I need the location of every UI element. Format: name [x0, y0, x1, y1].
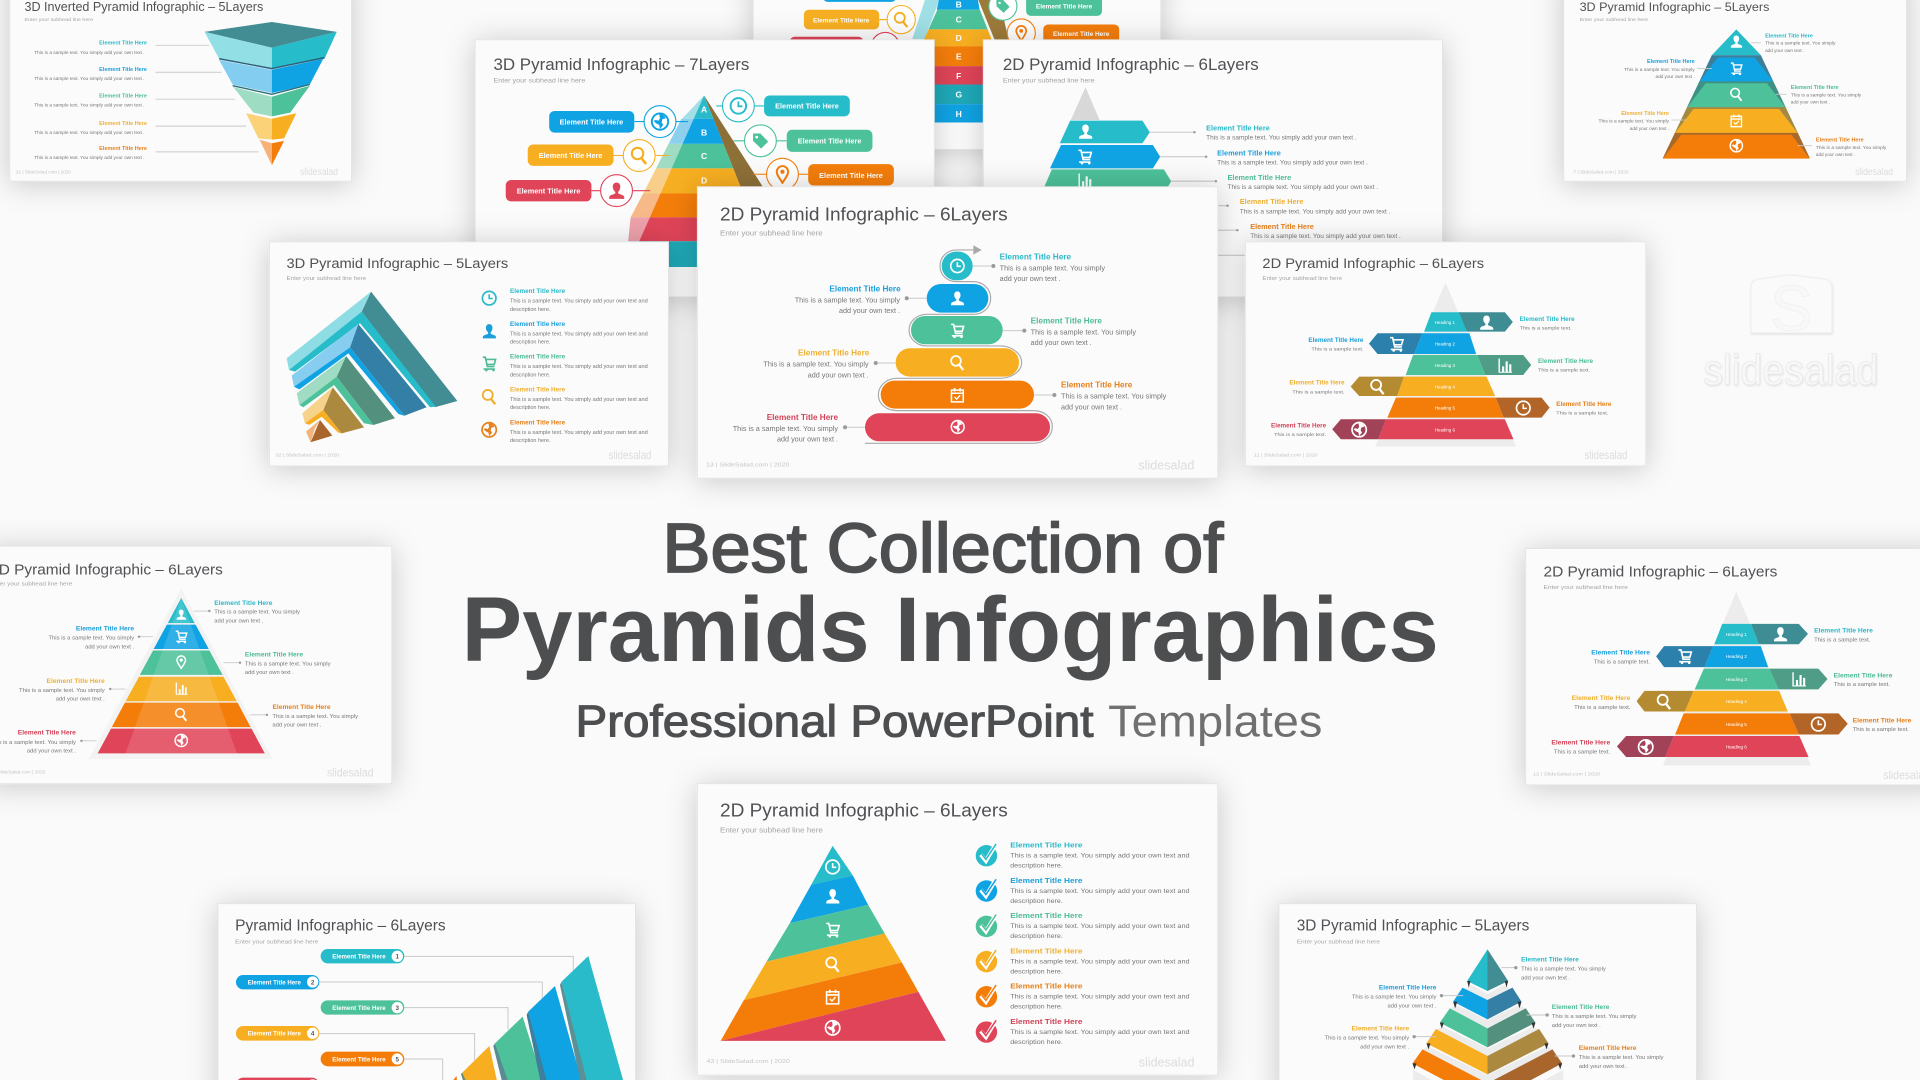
pyramid with arrow tabs — [1617, 592, 1848, 766]
callout pills — [790, 0, 1119, 61]
stepped 3D pyramid — [287, 292, 457, 442]
partial pyramid column: G — [955, 89, 962, 99]
element labels: This is a sample text. You simply add your own text . — [1250, 233, 1401, 240]
icon list: description here. — [510, 307, 550, 313]
element labels: Element Title Here — [1061, 380, 1133, 390]
element labels — [1324, 957, 1664, 1070]
pyramid with arrow tabs: Heading 2 — [1435, 342, 1455, 347]
element labels: This is a sample text. You simply — [1816, 145, 1887, 150]
element labels — [1551, 627, 1912, 755]
slide: 2D pyramid with heading arrows, right edge — [1526, 549, 1920, 785]
check list: Element Title Here — [1010, 1017, 1083, 1026]
element labels: Element Title Here — [798, 348, 870, 358]
logo: slidesalad embossed watermark: slidesalad — [1703, 346, 1878, 394]
slide: 2D pyramid with heading arrows, right of center: 11 | SlideSalad.com | 2020 — [1254, 453, 1318, 458]
pyramid with arrow tabs: Heading 3 — [1726, 677, 1747, 682]
logo: slidesalad embossed watermark — [1703, 274, 1878, 394]
element labels: This is a sample text. You simply — [1765, 41, 1836, 46]
slide: 3D stepped pyramid list: Enter your subhead line here — [287, 276, 366, 282]
icon list: description here. — [510, 438, 550, 444]
element labels: add your own text . — [1000, 275, 1061, 283]
icon list: description here. — [510, 372, 550, 378]
element labels: add your own text . — [214, 618, 264, 624]
slide: 3D pyramid 5 layers, top right — [1564, 0, 1907, 181]
element labels: This is a sample text. You simply — [48, 635, 134, 641]
pyramid with arrow tabs: Heading 6 — [1726, 745, 1747, 750]
numbered pills: Element Title Here — [332, 1056, 386, 1063]
element labels — [1271, 316, 1612, 438]
numbered pills: 1 — [396, 954, 400, 961]
partial pyramid column — [887, 0, 1025, 122]
element labels: Element Title Here — [1521, 957, 1579, 964]
slide: 3D inverted pyramid, top left: slidesalad — [300, 167, 338, 178]
slide: 2D slanted pyramid with check list, bottom center — [697, 784, 1218, 1075]
pyramid arrows — [1041, 87, 1171, 193]
numbered pills: Element Title Here — [248, 1031, 301, 1038]
element labels: This is a sample text. You simply add your own text . — [34, 103, 144, 109]
element labels: Element Title Here — [1551, 740, 1611, 747]
element labels: add your own text . — [1521, 975, 1571, 981]
element labels: Element Title Here — [829, 283, 901, 293]
pyramid with arrow tabs: Heading 4 — [1435, 384, 1455, 389]
element labels: This is a sample text. — [1814, 637, 1870, 643]
slide: 2D pyramid with light centre, left: slidesalad — [327, 765, 374, 779]
slide: 2D pyramid with heading arrows, right edge: Enter your subhead line here — [1543, 585, 1628, 591]
element labels: add your own text . — [1061, 403, 1122, 411]
element labels: This is a sample text. You simply — [1031, 328, 1136, 336]
numbered pills: Element Title Here — [332, 1005, 386, 1012]
element labels: This is a sample text. You simply — [19, 688, 105, 694]
element labels: add your own text . — [1630, 126, 1669, 131]
element labels: Element Title Here — [76, 626, 134, 633]
element labels: This is a sample text. — [1554, 749, 1610, 755]
7 layer pyramid: C — [701, 151, 707, 161]
slide: 2D pyramid with heading arrows, right edge: 12 | SlideSalad.com | 2020 — [1533, 772, 1601, 777]
icon list — [482, 288, 648, 444]
element labels: This is a sample text. — [1520, 325, 1572, 331]
element labels: This is a sample text. You simply add your own text . — [34, 155, 144, 161]
element labels: This is a sample text. You simply add your own text . — [34, 76, 144, 82]
element labels: add your own text . — [1031, 339, 1092, 347]
slide: 3D pyramid 7 layers — [475, 40, 934, 297]
icon list: Element Title Here — [510, 419, 566, 426]
callout pills with icons — [506, 90, 894, 207]
element labels: Element Title Here — [99, 121, 147, 127]
element labels: Element Title Here — [18, 730, 76, 737]
element labels: Element Title Here — [47, 678, 105, 685]
check list: description here. — [1010, 933, 1063, 940]
element labels: Element Title Here — [767, 412, 838, 422]
check list: This is a sample text. You simply add your own text and — [1010, 923, 1190, 930]
pyramid with arrow tabs: Heading 4 — [1726, 699, 1747, 704]
slide: 3D pyramid 7 layers: 3D Pyramid Infographic – 7Layers — [493, 56, 749, 74]
element labels: This is a sample text. You simply add your own text . — [34, 130, 144, 136]
element labels: This is a sample text. — [1274, 432, 1326, 438]
partial pyramid column: H — [956, 109, 962, 119]
pyramid with arrow tabs: Heading 6 — [1435, 427, 1455, 432]
element labels: Element Title Here — [1621, 111, 1669, 117]
element labels: Element Title Here — [1552, 1004, 1610, 1011]
element labels: add your own text . — [1360, 1044, 1410, 1050]
pyramid with arrow tabs — [1332, 283, 1550, 447]
slide: 3D pyramid partially hidden, top center — [753, 0, 1161, 149]
icon list: Element Title Here — [510, 321, 566, 328]
pyramid with arrow tabs: Heading 5 — [1435, 406, 1455, 411]
element labels: Element Title Here — [1289, 380, 1345, 387]
element labels: This is a sample text. You simply — [1552, 1014, 1637, 1020]
pyramid with arrow tabs: Heading 5 — [1726, 722, 1747, 727]
element labels: Element Title Here — [1556, 401, 1612, 408]
partial pyramid column: F — [956, 71, 961, 81]
slide: 2D slanted pyramid with check list, bottom center: slidesalad — [1139, 1055, 1194, 1070]
check list: This is a sample text. You simply add your own text and — [1010, 994, 1190, 1001]
slide: 2D pyramid with heading arrows, right of center: slidesalad — [1584, 449, 1627, 462]
element labels: Element Title Here — [1206, 124, 1270, 133]
element labels: This is a sample text. You simply — [1624, 67, 1696, 72]
element labels: This is a sample text. — [1594, 659, 1650, 665]
partial pyramid column: D — [956, 33, 962, 43]
callout pills with icons: Element Title Here — [798, 137, 861, 146]
check list: description here. — [1010, 968, 1063, 975]
stacked pills — [865, 252, 1050, 441]
7 layer pyramid: B — [701, 127, 707, 137]
element labels: Element Title Here — [1816, 137, 1864, 143]
slide: 3D inverted pyramid, top left: 31 | SlideSalad.com | 2020 — [16, 169, 72, 174]
slide: stacked pill pyramid, center: Enter your subhead line here — [720, 230, 823, 237]
slide: 3D pyramid 5 layers, top right: 3D Pyramid Infographic – 5Layers — [1580, 0, 1769, 14]
element labels: add your own text . — [1656, 74, 1695, 79]
element labels: Element Title Here — [1250, 222, 1314, 231]
check list: Element Title Here — [1010, 841, 1083, 850]
main title: Templates — [1108, 698, 1322, 747]
slide: 3D pyramid 5 layers, top right: 7 | SlideSalad.com | 2020 — [1573, 169, 1629, 174]
icon list: description here. — [510, 405, 550, 411]
slide: stacked pill pyramid, center: 2D Pyramid Infographic – 6Layers — [720, 204, 1008, 225]
slide: 3D pyramid 5 layers, top right: slidesalad — [1855, 167, 1893, 178]
3D layered pyramid — [1663, 29, 1810, 159]
element labels: Element Title Here — [99, 67, 147, 73]
six layer pyramid — [89, 589, 272, 759]
pyramid with arrow tabs: Heading 1 — [1435, 320, 1455, 325]
icon list: This is a sample text. You simply add your own text and — [510, 397, 648, 403]
slide: 2D pyramid with heading arrows, right of center: Enter your subhead line here — [1262, 276, 1342, 282]
check list: Element Title Here — [1010, 981, 1083, 990]
icon list: This is a sample text. You simply add your own text and — [510, 430, 648, 436]
numbered pills: Element Title Here — [332, 954, 386, 961]
slide: 3D pyramid 5 layers, top right: Enter your subhead line here — [1580, 17, 1649, 23]
element labels: Element Title Here — [1228, 173, 1291, 182]
main title: Pyramids Infographics — [462, 579, 1439, 681]
icon list: This is a sample text. You simply add your own text and — [510, 364, 648, 370]
numbered pills: 3 — [396, 1005, 400, 1012]
element labels: This is a sample text. You simply — [272, 714, 358, 720]
slide: 2D pyramid 6 layers arrows: 2D Pyramid Infographic – 6Layers — [1003, 56, 1259, 74]
slide: stacked pill pyramid, center — [697, 187, 1218, 478]
element labels: This is a sample text. — [1556, 410, 1608, 416]
element labels — [1599, 33, 1887, 157]
element labels: This is a sample text. You simply — [1599, 118, 1670, 123]
element labels: This is a sample text. You simply — [763, 361, 869, 369]
main title: Professional PowerPoint — [576, 698, 1093, 747]
numbered pills: 5 — [396, 1056, 400, 1063]
slide: stacked pill pyramid, center: 13 | SlideSalad.com | 2020 — [706, 463, 789, 469]
check list: description here. — [1010, 1039, 1063, 1046]
icon list: Element Title Here — [510, 288, 566, 295]
partial pyramid column: E — [956, 51, 962, 61]
element labels: add your own text . — [839, 307, 900, 315]
element labels: add your own text . — [808, 371, 869, 379]
element labels: add your own text . — [1579, 1064, 1628, 1070]
check list — [976, 841, 1190, 1046]
element labels: This is a sample text. You simply add your own text . — [1217, 159, 1368, 166]
element labels: This is a sample text. — [1834, 682, 1890, 688]
element labels: add your own text . — [1552, 1023, 1601, 1029]
slide: pyramid with numbered pills, bottom left — [218, 904, 636, 1080]
slide: 2D pyramid 6 layers arrows — [983, 40, 1442, 297]
element labels: This is a sample text. You simply add your own text . — [1228, 184, 1378, 191]
pyramid with arrow tabs: Heading 2 — [1726, 654, 1747, 659]
element labels — [34, 41, 258, 161]
element labels: Element Title Here — [1308, 337, 1364, 344]
element labels: Element Title Here — [1520, 316, 1575, 323]
element labels: Element Title Here — [99, 94, 147, 100]
slide: stacked pill pyramid, center: slidesalad — [1138, 458, 1194, 472]
slide: 2D pyramid with heading arrows, right edge: 2D Pyramid Infographic – 6Layers — [1543, 565, 1777, 581]
element labels: add your own text . — [1387, 1003, 1437, 1009]
element labels: add your own text . — [245, 670, 294, 676]
element labels: Element Title Here — [99, 41, 147, 47]
numbered pills — [236, 949, 404, 1080]
element labels: This is a sample text. You simply — [733, 425, 838, 433]
element labels: This is a sample text. You simply — [1791, 92, 1862, 97]
element labels: This is a sample text. — [1538, 368, 1590, 374]
element labels: Element Title Here — [1853, 717, 1912, 724]
slide: 3D stepped pyramid list: slidesalad — [609, 449, 651, 462]
slide: pyramid with numbered pills, bottom left: Enter your subhead line here — [235, 939, 318, 945]
snake outline and arrow — [865, 250, 1052, 443]
element labels: This is a sample text. You simply add your own text . — [1206, 135, 1357, 142]
element labels: Element Title Here — [1647, 59, 1695, 65]
check list: Element Title Here — [1010, 911, 1083, 920]
slanted layers — [453, 956, 625, 1080]
check list: description here. — [1010, 863, 1063, 870]
numbered pills: 2 — [311, 979, 315, 986]
element labels: Element Title Here — [1765, 33, 1813, 39]
slide: 3D inverted pyramid, top left: Enter your subhead line here — [24, 17, 93, 23]
slanted pyramid — [721, 846, 946, 1041]
slide: 2D slanted pyramid with check list, bottom center: Enter your subhead line here — [720, 827, 823, 835]
element labels: Element Title Here — [1591, 650, 1650, 657]
7 layer pyramid — [628, 96, 784, 267]
check list: This is a sample text. You simply add your own text and — [1010, 1029, 1190, 1036]
slide: 3D stepped pyramid list — [269, 242, 669, 466]
slide: 3D chevron pyramid, bottom right: Enter your subhead line here — [1297, 939, 1380, 945]
icon list: description here. — [510, 340, 550, 346]
callout pills with icons: Element Title Here — [819, 171, 883, 180]
check list: Element Title Here — [1010, 876, 1083, 885]
main title: Best Collection of — [662, 509, 1224, 587]
numbered pills: 4 — [311, 1031, 315, 1038]
pyramid with arrow tabs: Heading 3 — [1435, 363, 1455, 368]
element labels: This is a sample text. You simply — [245, 661, 331, 667]
element labels — [733, 251, 1167, 444]
element labels: This is a sample text. You simply — [1521, 967, 1606, 973]
element labels: Element Title Here — [1814, 627, 1873, 634]
element labels: Element Title Here — [1379, 984, 1437, 991]
element labels: This is a sample text. You simply — [1000, 264, 1105, 272]
element labels: add your own text . — [1791, 99, 1830, 104]
callout pills with icons: Element Title Here — [539, 151, 602, 160]
element labels — [0, 600, 358, 754]
element labels: This is a sample text. You simply — [795, 296, 900, 304]
element labels: This is a sample text. You simply add your own text . — [34, 50, 144, 56]
partial pyramid column: C — [956, 15, 962, 25]
slide: 3D pyramid 7 layers: Enter your subhead line here — [493, 78, 586, 85]
check list: Element Title Here — [1010, 946, 1083, 955]
element labels: Element Title Here — [1217, 149, 1281, 158]
icon list: This is a sample text. You simply add your own text and — [510, 331, 648, 337]
callout pills with icons: Element Title Here — [560, 118, 623, 127]
element labels: Element Title Here — [1031, 315, 1102, 325]
element labels: Element Title Here — [214, 600, 273, 607]
connector lines — [319, 956, 573, 1080]
check list: This is a sample text. You simply add your own text and — [1010, 958, 1190, 965]
element labels: Element Title Here — [1579, 1045, 1637, 1052]
element labels: add your own text . — [777, 436, 838, 444]
slide: 2D pyramid 6 layers arrows: Enter your subhead line here — [1003, 78, 1095, 85]
element labels: This is a sample text. You simply add your own text . — [1240, 208, 1391, 215]
check list: description here. — [1010, 898, 1063, 905]
slide: 3D stepped pyramid list: 3D Pyramid Infographic – 5Layers — [287, 256, 508, 272]
element labels: This is a sample text. You simply — [1324, 1035, 1409, 1041]
check list: This is a sample text. You simply add your own text and — [1010, 888, 1190, 895]
element labels: add your own text . — [1816, 152, 1855, 157]
slide: pyramid with numbered pills, bottom left: Pyramid Infographic – 6Layers — [235, 918, 446, 935]
element labels: Element Title Here — [1572, 695, 1631, 702]
main title — [462, 509, 1439, 747]
element labels: Element Title Here — [1538, 358, 1594, 365]
callout pills: Element Title Here — [813, 17, 870, 24]
element labels: add your own text . — [272, 723, 322, 729]
element labels: add your own text . — [85, 644, 135, 650]
check list: This is a sample text. You simply add your own text and — [1010, 853, 1190, 860]
7 layer pyramid: D — [701, 176, 707, 186]
logo: slidesalad embossed watermark: S — [1770, 274, 1813, 345]
slide: 3D inverted pyramid, top left — [10, 0, 351, 181]
callout pills: Element Title Here — [1053, 31, 1110, 38]
element labels: This is a sample text. — [1292, 389, 1344, 395]
chevron pyramid — [1412, 949, 1563, 1080]
element labels: This is a sample text. — [1574, 705, 1630, 711]
element labels: Element Title Here — [1000, 251, 1071, 261]
element labels: Element Title Here — [1240, 197, 1303, 206]
callout pills with icons: Element Title Here — [517, 187, 580, 196]
slide: 2D slanted pyramid with check list, bottom center: 2D Pyramid Infographic – 6Layers — [720, 800, 1008, 821]
element labels: add your own text . — [1765, 48, 1804, 53]
slide: 3D chevron pyramid, bottom right: 3D Pyramid Infographic – 5Layers — [1297, 918, 1530, 935]
element labels: This is a sample text. You simply — [1352, 994, 1437, 1000]
element labels: add your own text . — [27, 748, 76, 754]
element labels: Element Title Here — [99, 146, 147, 152]
icon list: Element Title Here — [510, 354, 566, 361]
element labels — [1150, 124, 1401, 255]
slide: 3D chevron pyramid, bottom right — [1279, 904, 1697, 1080]
numbered pills: Element Title Here — [248, 979, 301, 986]
icon list: Element Title Here — [510, 386, 566, 393]
inverted pyramid chart — [204, 22, 337, 165]
element labels: Element Title Here — [272, 704, 331, 711]
icon list: This is a sample text. You simply add your own text and — [510, 298, 648, 304]
element labels: Element Title Here — [1271, 422, 1327, 429]
7 layer pyramid: A — [701, 105, 707, 115]
element labels: This is a sample text. — [1853, 727, 1909, 733]
callout pills: Element Title Here — [1036, 4, 1092, 11]
element labels: This is a sample text. You simply — [214, 609, 300, 615]
element labels: Element Title Here — [1791, 85, 1839, 91]
slide: 2D pyramid with heading arrows, right of center: 2D Pyramid Infographic – 6Layers — [1262, 256, 1484, 272]
element labels: Element Title Here — [245, 652, 303, 659]
element labels: This is a sample text. — [1311, 346, 1363, 352]
slide: 2D pyramid with heading arrows, right of center — [1245, 242, 1646, 466]
slide: 3D stepped pyramid list: 32 | SlideSalad.com | 2020 — [276, 453, 340, 458]
element labels: Element Title Here — [1351, 1025, 1409, 1032]
element labels: Element Title Here — [1834, 672, 1893, 679]
slide: 2D slanted pyramid with check list, bottom center: 43 | SlideSalad.com | 2020 — [707, 1059, 790, 1065]
element labels: This is a sample text. You simply — [1579, 1055, 1664, 1061]
pyramid with arrow tabs: Heading 1 — [1726, 632, 1747, 637]
element labels: This is a sample text. You simply — [1061, 393, 1167, 401]
slide: 2D pyramid with light centre, left — [0, 546, 392, 784]
check list: description here. — [1010, 1004, 1063, 1011]
callout pills with icons: Element Title Here — [775, 102, 839, 111]
element labels: add your own text . — [56, 696, 105, 702]
